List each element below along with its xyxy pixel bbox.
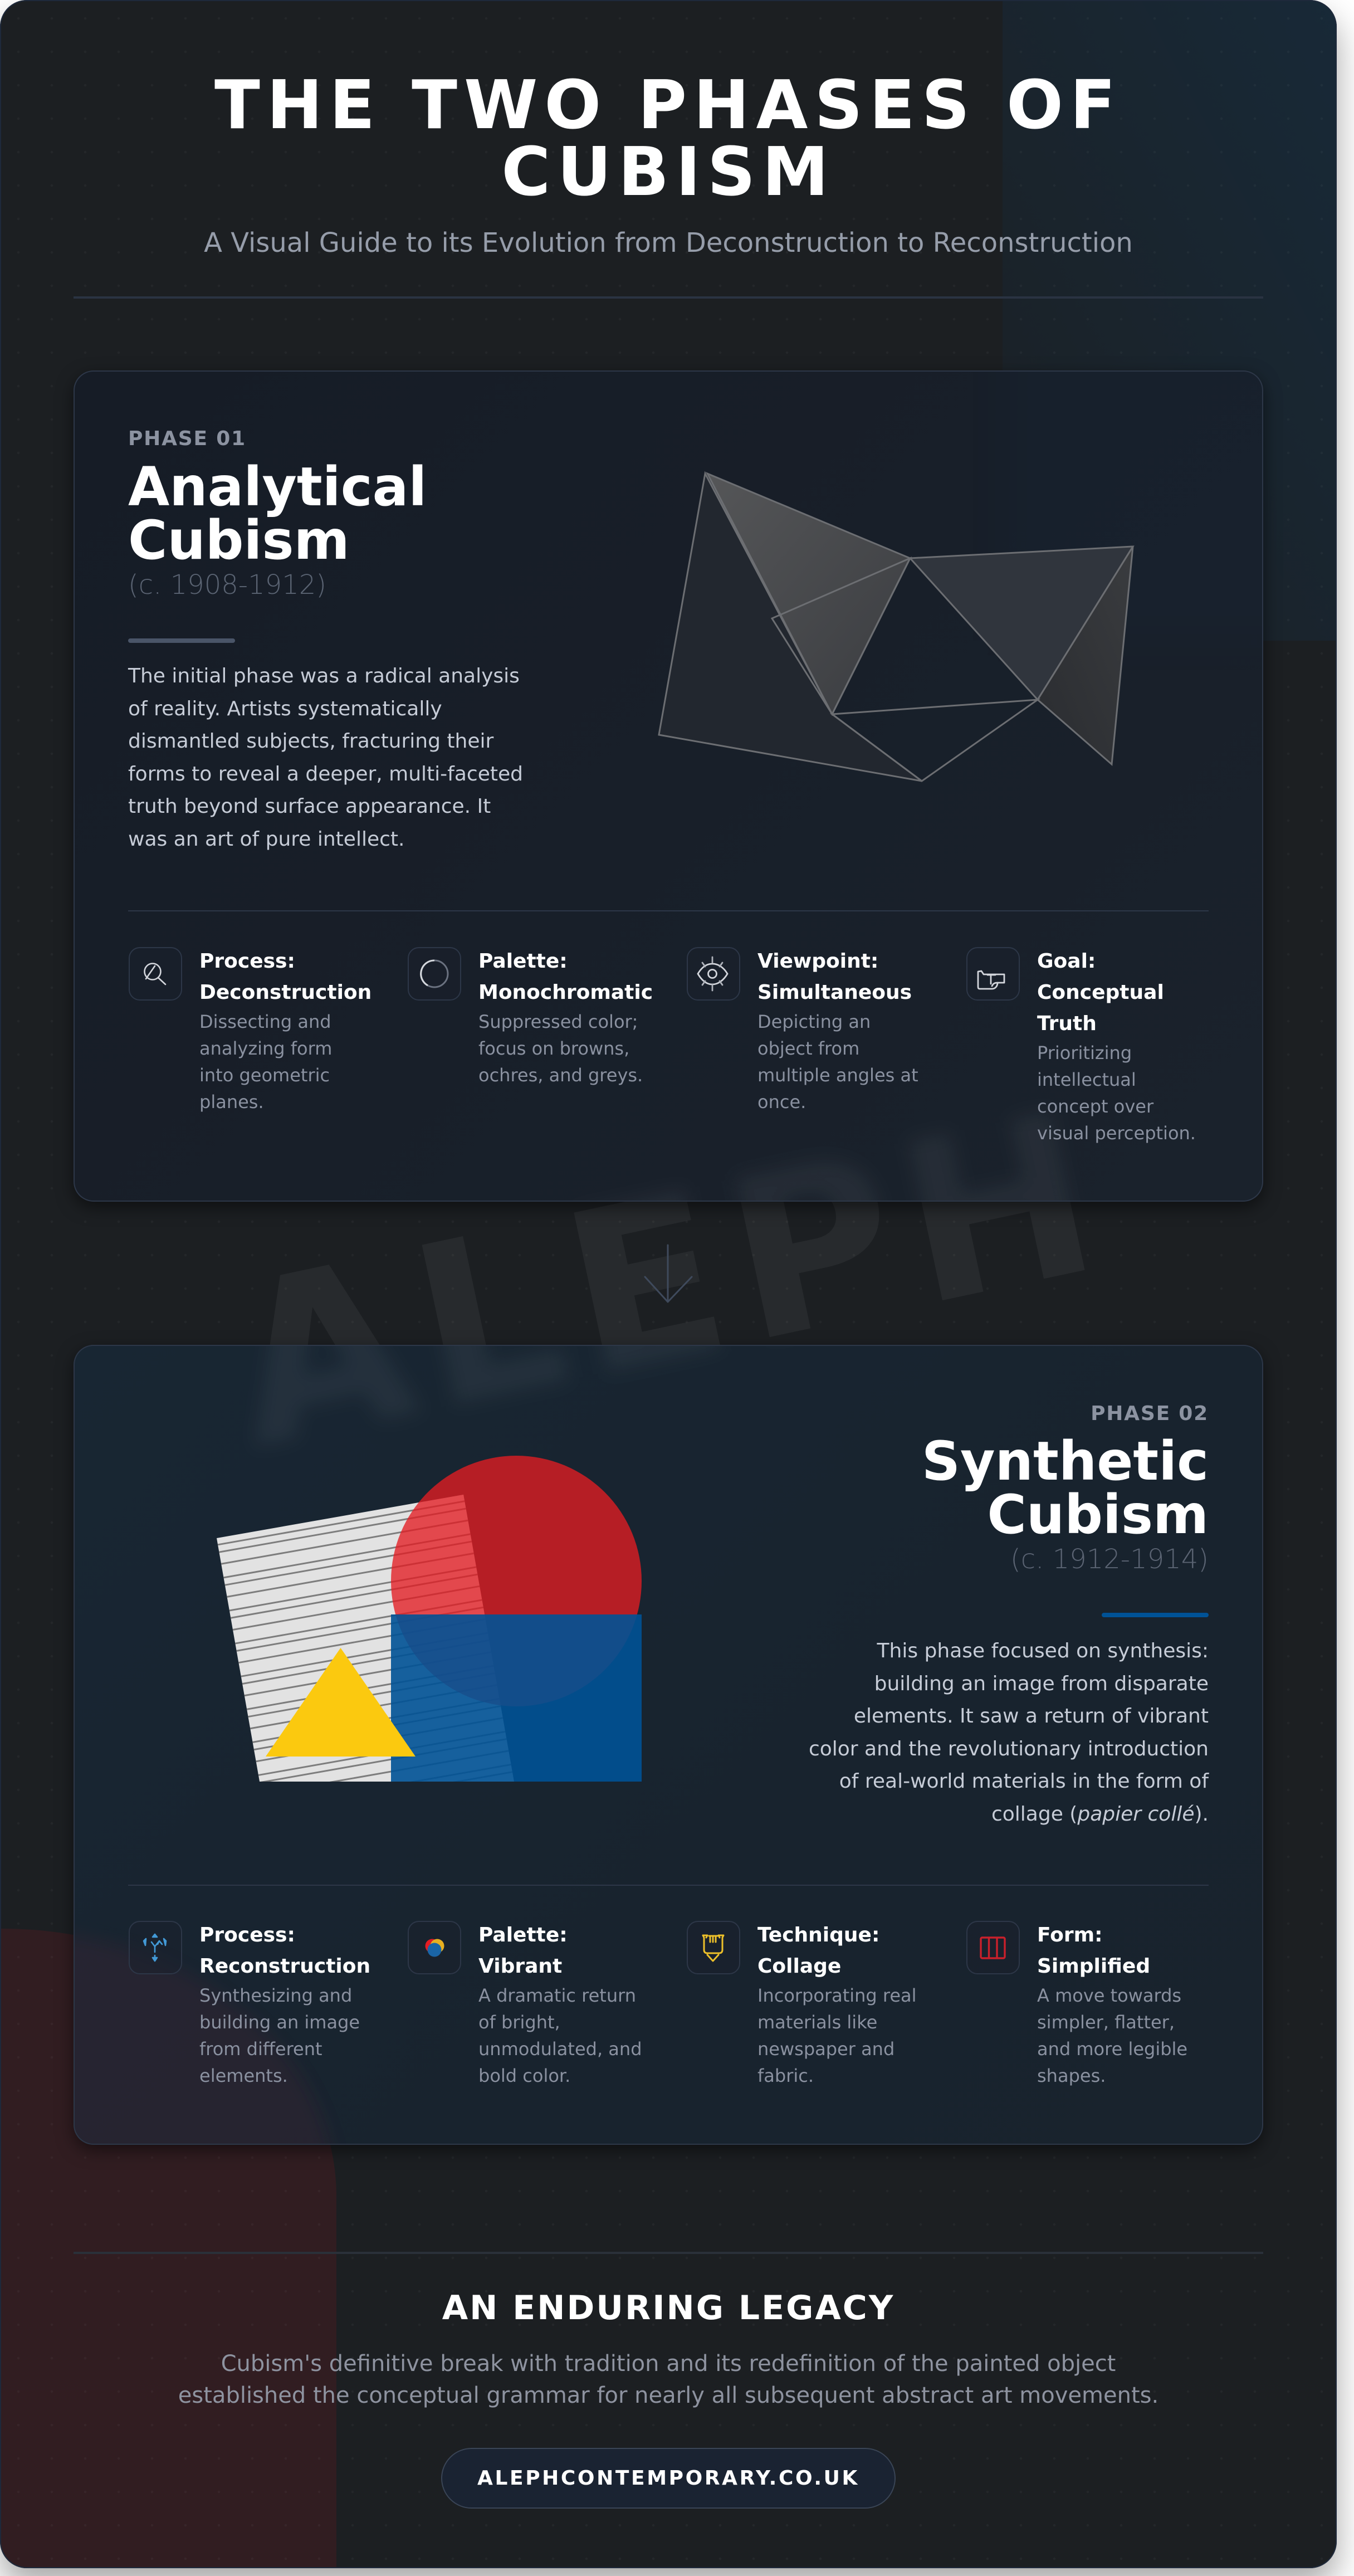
- description: of real-world materials in the form of: [839, 1770, 1209, 1793]
- icon: glue brush: [687, 1921, 740, 1974]
- description: of reality. Artists systematically: [128, 697, 442, 720]
- subtitle: A Visual Guide to its Evolution from Deconstruction to Reconstruction: [204, 227, 1133, 258]
- feature text: Suppressed color;: [478, 1011, 638, 1032]
- feature text: Monochromatic: [478, 981, 653, 1004]
- watermark: ALEPH: ALEPH: [211, 1061, 1129, 1499]
- feature text: Simplified: [1037, 1955, 1150, 1978]
- phase label: PHASE 01: [128, 427, 246, 450]
- feature text: Vibrant: [478, 1955, 562, 1978]
- header: [204, 67, 1133, 258]
- website button: ALEPHCONTEMPORARY.CO.UK: [477, 2467, 859, 2490]
- description: This phase focused on synthesis:: [877, 1640, 1209, 1662]
- feature text: Dissecting and: [199, 1011, 331, 1032]
- description: dismantled subjects, fracturing their: [128, 730, 493, 753]
- feature text: [199, 950, 372, 1113]
- feature text: ochres, and greys.: [478, 1065, 643, 1086]
- feature: form simplified: [966, 1921, 1234, 2144]
- feature text: and more legible: [1037, 2038, 1187, 2060]
- feature text: Truth: [1037, 1012, 1097, 1035]
- phase heading: Analytical: [128, 456, 427, 518]
- phase heading: Synthetic: [922, 1430, 1209, 1492]
- accent bar: [128, 638, 235, 643]
- feature text: materials like: [757, 2012, 877, 2033]
- accent bar: [1102, 1613, 1209, 1617]
- feature: process reconstruction: [129, 1921, 370, 2086]
- description: elements. It saw a return of vibrant: [854, 1705, 1209, 1728]
- feature text: Conceptual: [1037, 981, 1164, 1004]
- feature text: visual perception.: [1037, 1123, 1196, 1144]
- legacy text: [74, 2348, 1263, 2412]
- feature text: [478, 1920, 642, 2089]
- feature text: [1037, 1920, 1187, 2089]
- title: [214, 67, 1122, 211]
- feature text: A dramatic return: [478, 1985, 636, 2006]
- phase heading: [922, 1430, 1209, 1546]
- description: forms to reveal a deeper, multi-faceted: [128, 763, 523, 786]
- feature text: bold color.: [478, 2065, 570, 2086]
- feature text: Process:: [199, 950, 295, 973]
- feature text: Palette:: [478, 950, 568, 973]
- description: [128, 665, 523, 851]
- feature text: unmodulated, and: [478, 2038, 642, 2060]
- website button: [441, 2448, 896, 2509]
- legacy section: [74, 2279, 1263, 2512]
- illustration: fractured planes: [658, 471, 1135, 782]
- phase heading: [128, 456, 427, 572]
- feature: palette vibrant: [408, 1921, 675, 2144]
- feature text: intellectual: [1037, 1069, 1136, 1090]
- feature text: Deconstruction: [199, 981, 372, 1004]
- feature text: planes.: [199, 1091, 264, 1113]
- description: was an art of pure intellect.: [128, 828, 404, 851]
- feature text: Technique:: [757, 1924, 879, 1946]
- decorative blue block: [1003, 0, 1337, 641]
- feature text: Viewpoint:: [757, 950, 878, 973]
- arrow: down between phases: [644, 1245, 693, 1302]
- description: The initial phase was a radical analysis: [128, 665, 520, 687]
- feature text: Depicting an: [757, 1011, 871, 1032]
- feature: process deconstruction: [129, 947, 372, 1113]
- feature text: building an image: [199, 2012, 360, 2033]
- feature text: from different: [199, 2038, 322, 2060]
- description: truth beyond surface appearance. It: [128, 795, 491, 818]
- feature text: [757, 950, 918, 1113]
- feature text: Reconstruction: [199, 1955, 370, 1978]
- illustration: collage: [217, 1456, 642, 1782]
- feature text: object from: [757, 1038, 859, 1059]
- feature text: Collage: [757, 1955, 841, 1978]
- feature text: multiple angles at: [757, 1065, 918, 1086]
- icon: pointing hand: [966, 947, 1020, 1001]
- feature text: [757, 1920, 917, 2089]
- feature text: Goal:: [1037, 950, 1096, 973]
- feature: viewpoint simultaneous: [687, 947, 918, 1113]
- feature text: concept over: [1037, 1096, 1153, 1117]
- phase date: (c. 1908-1912): [128, 569, 326, 601]
- phase heading: Cubism: [128, 509, 350, 572]
- legacy text: Cubism's definitive break with tradition and its redefinition of the painted object: [221, 2351, 1116, 2377]
- feature text: Synthesizing and: [199, 1985, 352, 2006]
- phase label: PHASE 02: [1091, 1402, 1209, 1425]
- panel: phase 01 analytical cubism: [74, 370, 1263, 1202]
- description: collage (papier collé).: [991, 1803, 1209, 1826]
- feature: palette monochromatic: [408, 947, 653, 1086]
- phase heading: Cubism: [987, 1484, 1209, 1546]
- icon: converging arrows: [129, 1921, 182, 1974]
- icon: eye: [687, 947, 740, 1001]
- feature text: [1037, 950, 1196, 1144]
- title: CUBISM: [501, 134, 835, 211]
- feature text: shapes.: [1037, 2065, 1106, 2086]
- icon: partial ring: [408, 947, 461, 1001]
- decorative red block: [0, 1929, 336, 2568]
- feature: technique collage: [687, 1921, 954, 2144]
- feature text: [478, 950, 653, 1086]
- feature text: of bright,: [478, 2012, 560, 2033]
- icon: magnifier: [129, 947, 182, 1001]
- feature text: Simultaneous: [757, 981, 912, 1004]
- feature: goal conceptual truth: [966, 947, 1196, 1144]
- legacy text: established the conceptual grammar for nearly all subsequent abstract art movements.: [178, 2383, 1159, 2408]
- icon: three columns: [966, 1921, 1020, 1974]
- description: building an image from disparate: [874, 1672, 1209, 1695]
- title: THE TWO PHASES OF: [214, 67, 1122, 144]
- feature text: elements.: [199, 2065, 288, 2086]
- feature text: Incorporating real: [757, 1985, 917, 2006]
- feature text: focus on browns,: [478, 1038, 629, 1059]
- feature text: [199, 1920, 370, 2089]
- feature text: Process:: [199, 1924, 295, 1946]
- feature text: simpler, flatter,: [1037, 2012, 1175, 2033]
- panel: phase 02 synthetic cubism: [74, 1345, 1263, 2145]
- feature text: Prioritizing: [1037, 1042, 1132, 1063]
- feature text: newspaper and: [757, 2038, 894, 2060]
- description: color and the revolutionary introduction: [809, 1738, 1209, 1760]
- feature text: A move towards: [1037, 1985, 1181, 2006]
- icon: overlapping colors: [408, 1921, 461, 1974]
- legacy heading: AN ENDURING LEGACY: [442, 2289, 894, 2328]
- feature text: into geometric: [199, 1065, 330, 1086]
- feature text: Palette:: [478, 1924, 568, 1946]
- phase date: (c. 1912-1914): [1010, 1544, 1209, 1575]
- description: [809, 1640, 1209, 1826]
- feature text: once.: [757, 1091, 806, 1113]
- feature text: analyzing form: [199, 1038, 332, 1059]
- feature text: Form:: [1037, 1924, 1103, 1946]
- feature text: fabric.: [757, 2065, 814, 2086]
